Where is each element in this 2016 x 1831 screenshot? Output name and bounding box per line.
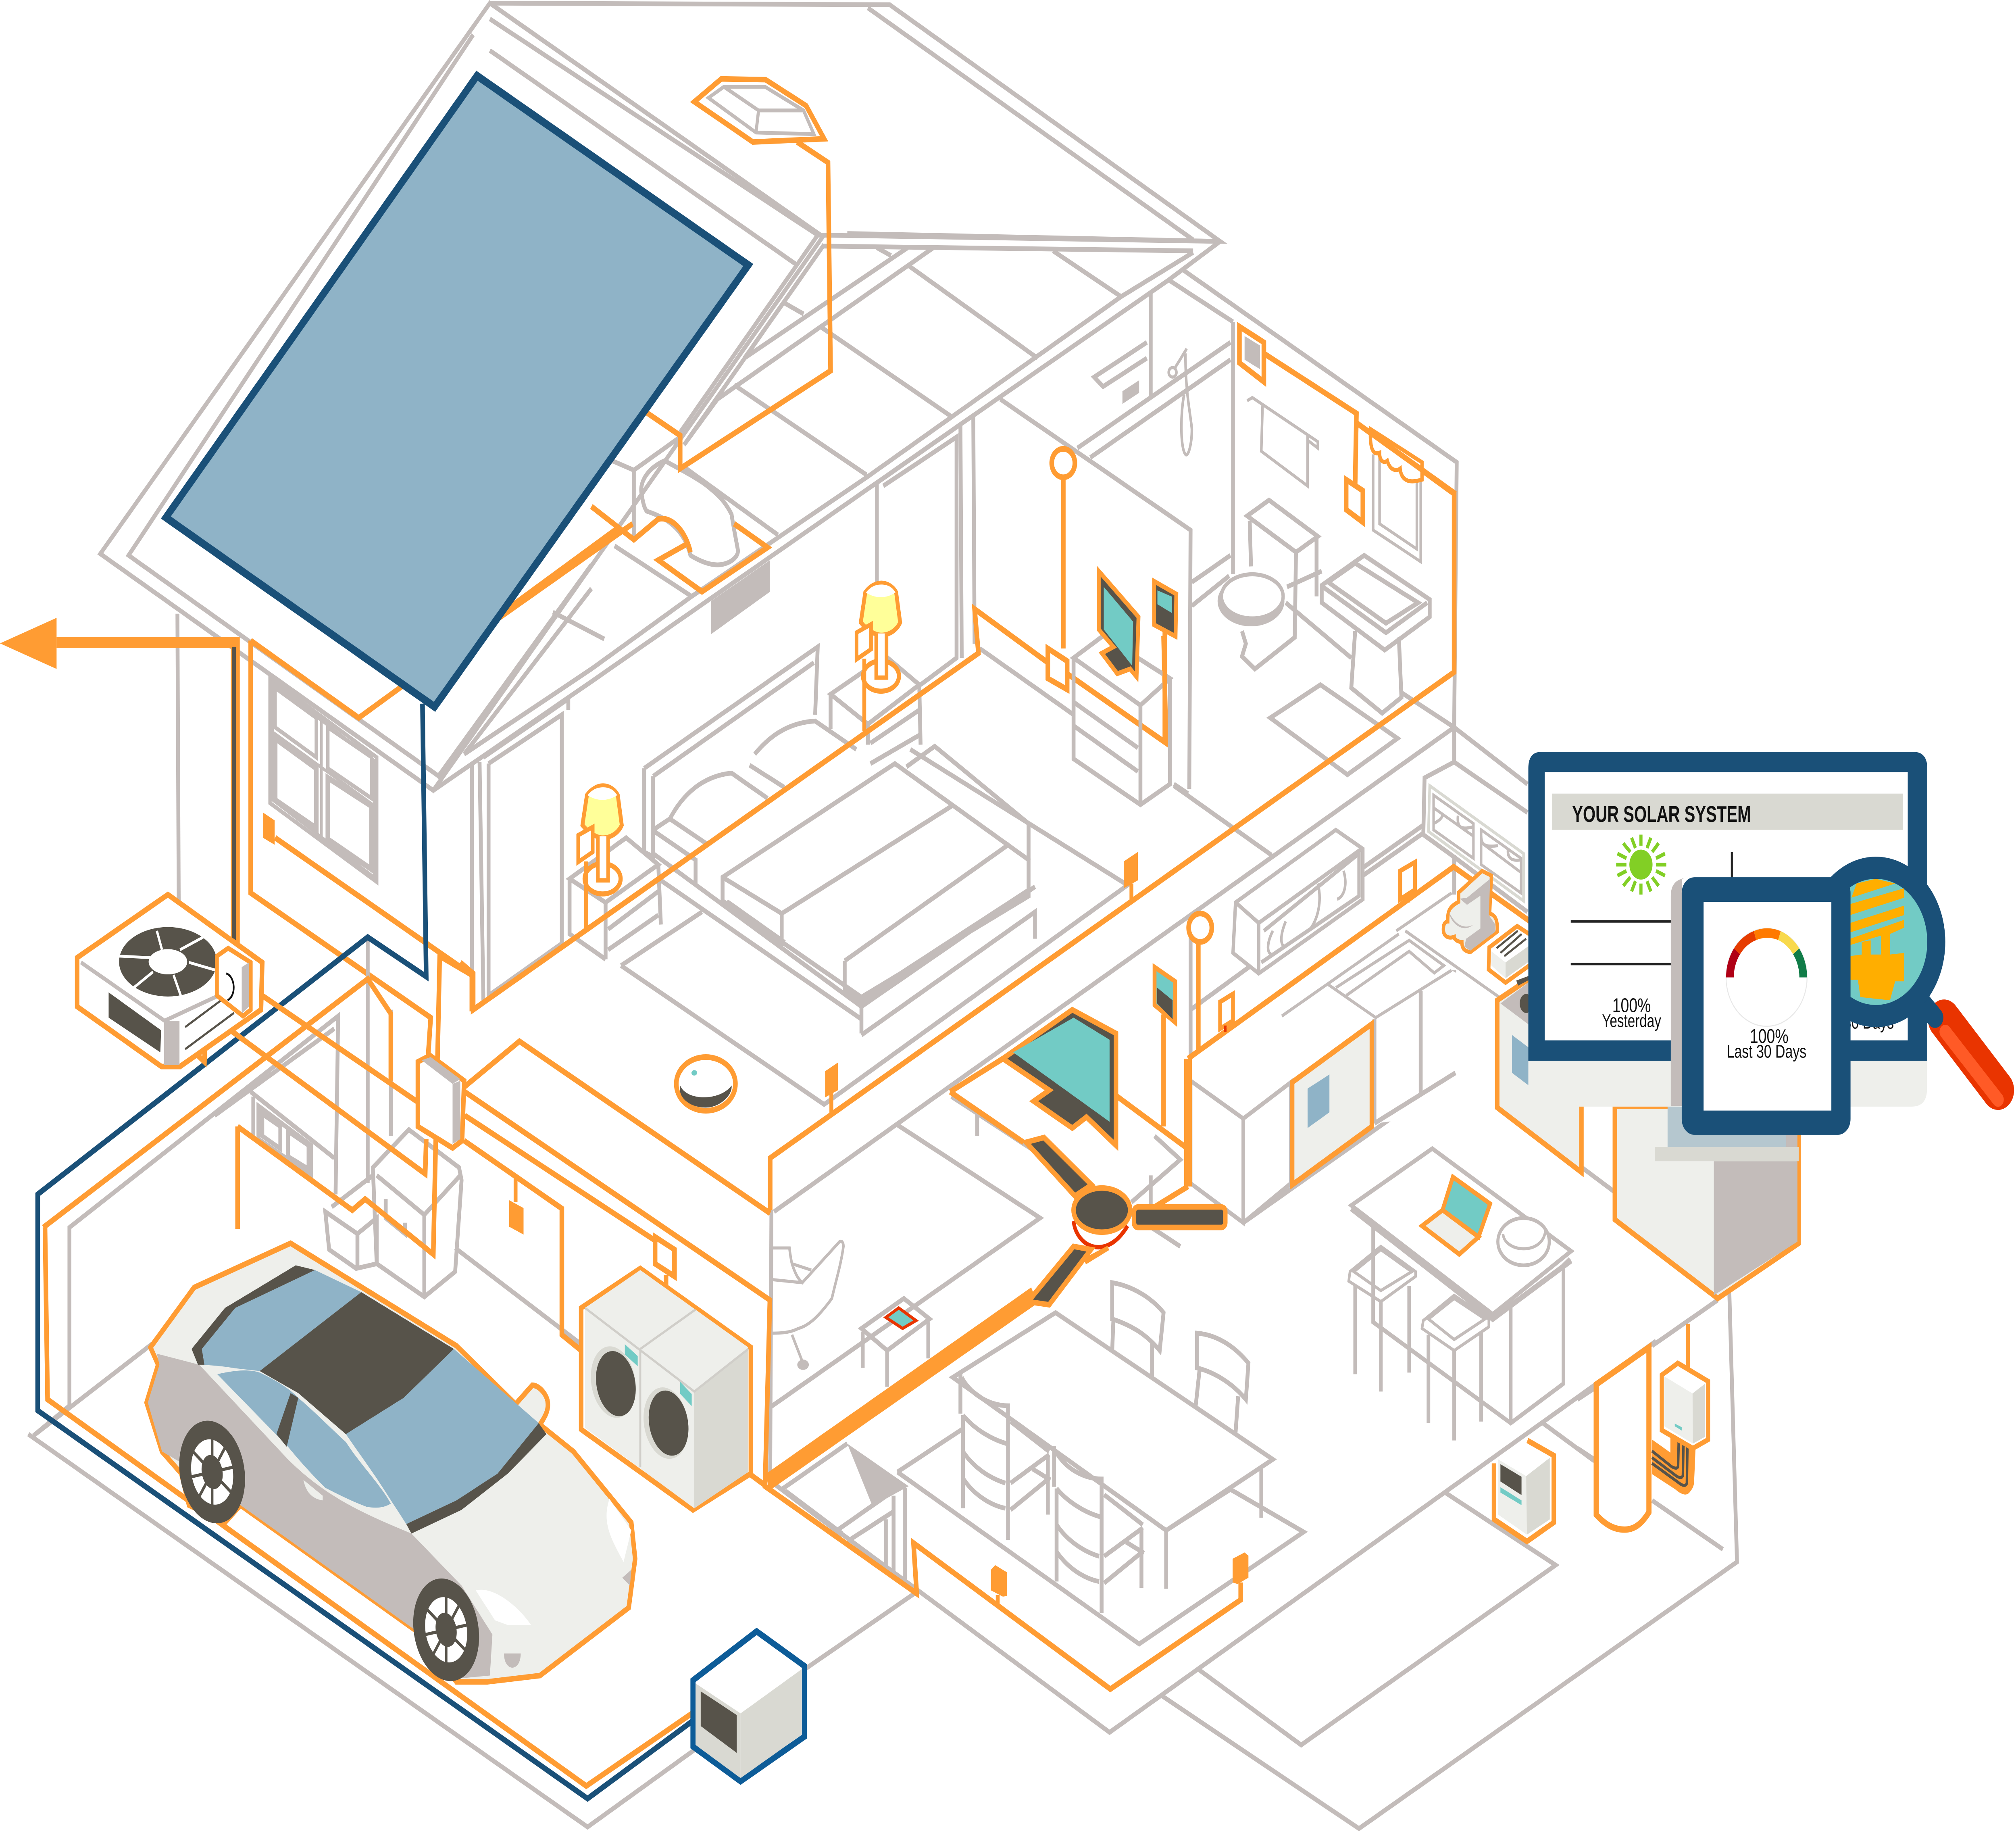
icon: outlet flags bbox=[509, 852, 1248, 1606]
base cabinet with monitor stand bbox=[1615, 1106, 1799, 1299]
dining table and rug bbox=[898, 1313, 1304, 1644]
icon: export arrow bbox=[0, 618, 235, 947]
rear wheel bbox=[170, 1412, 254, 1533]
icon: bedroom lamp left bbox=[578, 786, 622, 929]
icon: bedroom lamp right bbox=[856, 583, 900, 731]
tablet bbox=[1671, 877, 1851, 1135]
water heater bbox=[1596, 1347, 1649, 1530]
front wheel bbox=[404, 1569, 488, 1690]
kitchen upper window cabinets bbox=[1429, 786, 1524, 901]
utility meter box bbox=[1494, 1441, 1554, 1541]
last 30 days stat on monitor: Last 30 Days bbox=[1814, 1012, 1894, 1032]
magnifying glass bbox=[1806, 857, 1998, 1100]
icon: bedroom tv and tablet bbox=[1099, 571, 1176, 742]
yesterday stat: Yesterday bbox=[1602, 1011, 1661, 1031]
electric panel with conduit bbox=[1652, 1324, 1708, 1495]
yesterday stat: 100% bbox=[1612, 995, 1651, 1017]
icon: roof vent bbox=[694, 79, 824, 142]
battery box bbox=[693, 1631, 804, 1781]
monitor chart lines bbox=[1571, 852, 1732, 964]
icon: robot vacuum bbox=[676, 1057, 735, 1111]
garage structure bbox=[28, 941, 697, 1827]
washer and dryer bbox=[581, 1268, 751, 1510]
tablet stat bbox=[1727, 1026, 1806, 1061]
bathroom fixtures bbox=[1218, 398, 1454, 775]
nightstands bbox=[570, 656, 921, 959]
living room, kitchen and outer floor structure bbox=[769, 727, 1737, 1829]
dining chair near left bbox=[960, 1372, 1050, 1540]
wiring: ground floor kitchen and fan bbox=[950, 862, 1530, 1207]
tablet stat: Last 30 Days bbox=[1727, 1041, 1806, 1061]
icon: shower head and hose bbox=[1169, 349, 1192, 455]
monitor header bar: YOUR SOLAR SYSTEM bbox=[1572, 801, 1751, 827]
icon: wall vent box insert bbox=[1245, 336, 1260, 369]
monitor header bar bbox=[1552, 794, 1903, 830]
solar inverter bbox=[418, 1055, 464, 1148]
roof and attic structure bbox=[100, 3, 1220, 790]
air conditioner bbox=[77, 895, 262, 1067]
icon: left wall outlet bbox=[263, 813, 275, 845]
blue dc circuit line bbox=[37, 704, 694, 1799]
desktop monitor bbox=[1528, 752, 1927, 1107]
icon: wall tablet bbox=[1155, 967, 1225, 1032]
upper floor walls and door bbox=[177, 270, 1457, 1010]
kitchen counter and wall cabinets bbox=[1191, 830, 1499, 1223]
window: left wall bbox=[270, 678, 377, 882]
bedroom furniture bbox=[621, 647, 1128, 1104]
stairs bbox=[769, 1443, 909, 1581]
ceiling fan bbox=[1026, 1138, 1225, 1305]
bar stools bbox=[1349, 1246, 1489, 1441]
solar panel bbox=[166, 76, 748, 707]
thick orange feeder to ceiling fan bbox=[766, 1287, 1037, 1491]
tablet stat: 100% bbox=[1750, 1026, 1789, 1047]
wiring: garage orange circuit bbox=[43, 956, 1241, 1786]
wiring: upper floor orange circuit bbox=[251, 142, 1456, 1213]
armchair and side table bbox=[771, 1241, 929, 1387]
yesterday stat bbox=[1602, 995, 1661, 1031]
dining chair near right bbox=[1054, 1446, 1144, 1613]
dining chairs far side bbox=[1112, 1283, 1248, 1433]
kitchen island with laptop and bowl bbox=[1351, 1149, 1571, 1423]
kitchen oven bbox=[1497, 978, 1581, 1172]
window with curtain: bathroom bbox=[1356, 423, 1456, 562]
icon: green sun bbox=[1616, 834, 1666, 895]
car bbox=[147, 1243, 635, 1690]
icon: coffee maker bbox=[1443, 871, 1497, 952]
gauge bbox=[1726, 928, 1807, 1026]
icon: toaster bbox=[1489, 926, 1545, 984]
television bbox=[1003, 1010, 1116, 1145]
dresser bbox=[1074, 636, 1188, 805]
